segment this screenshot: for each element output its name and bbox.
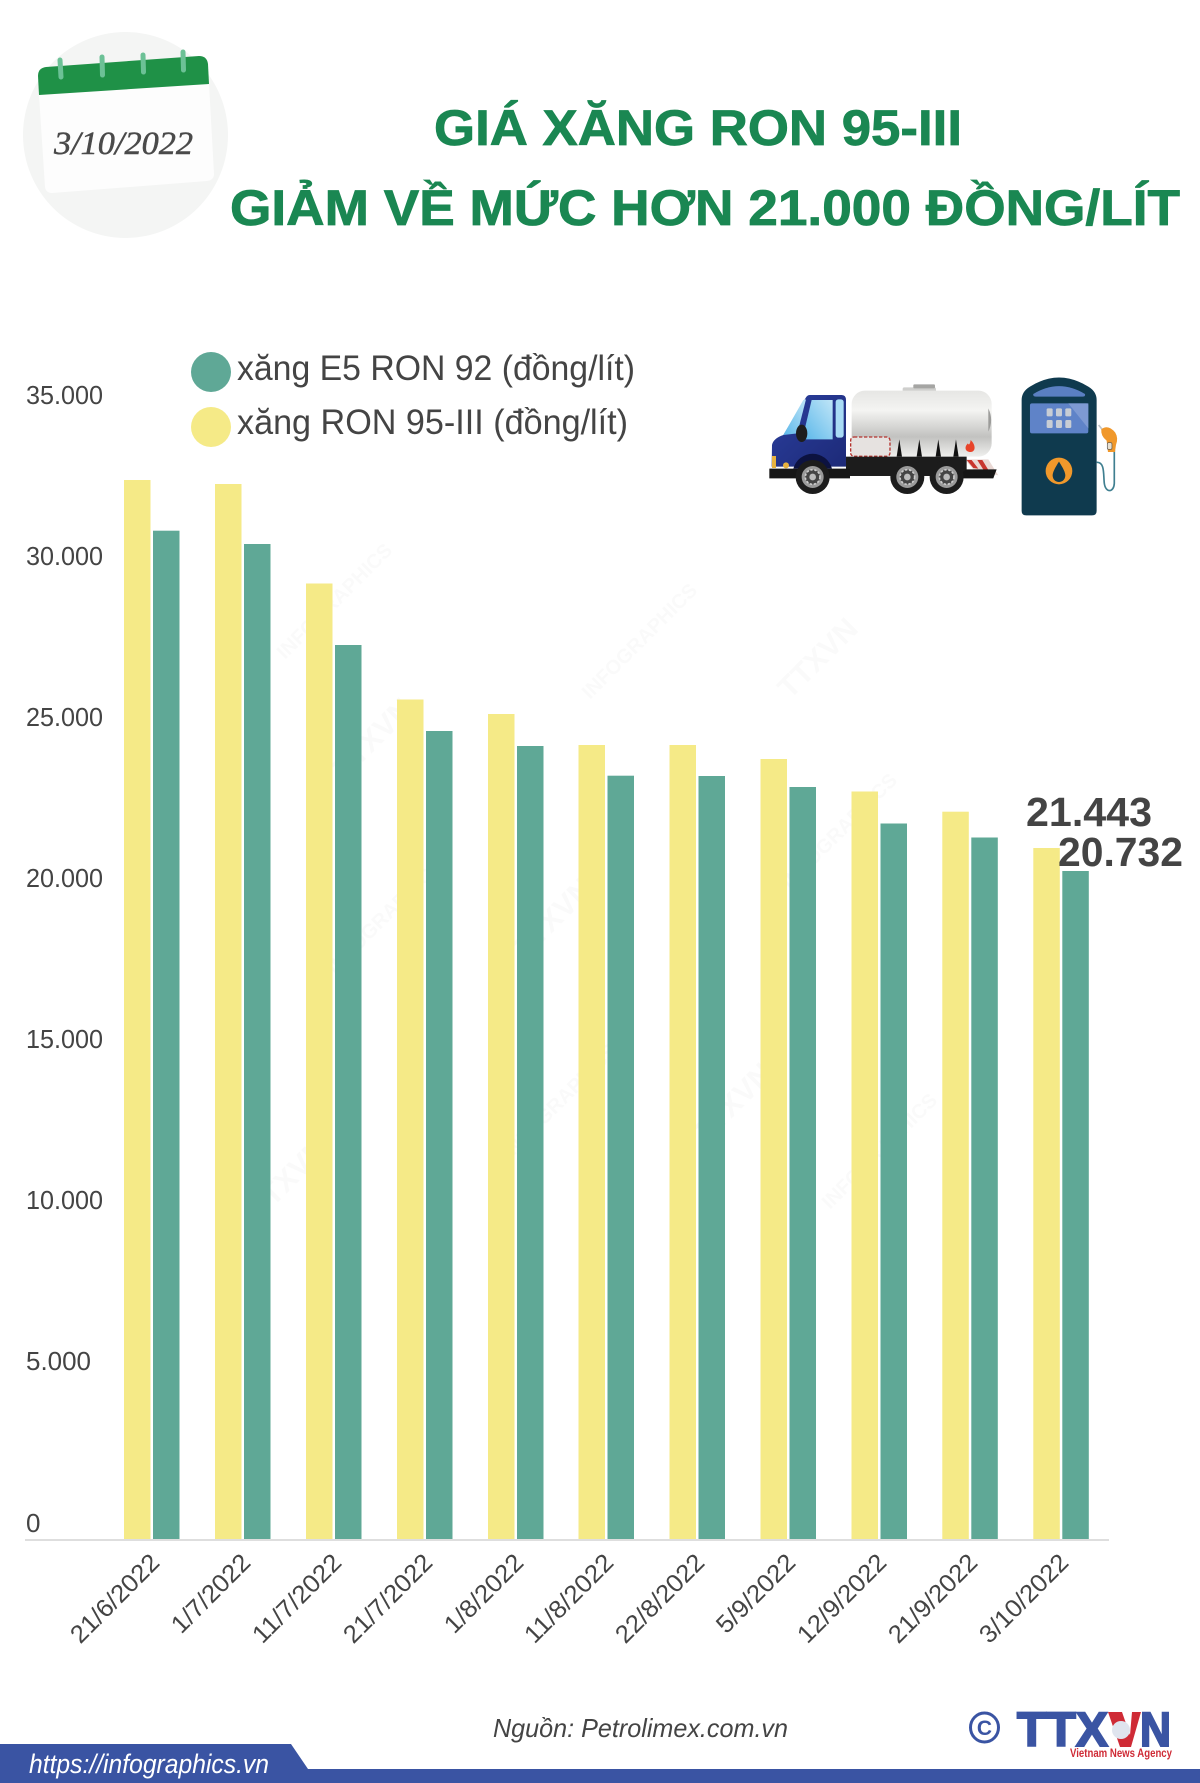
logo: TTXVN [970,1704,1173,1760]
y axis labels: 10.000 [26,1185,103,1215]
icon: fuel pump [1022,377,1117,515]
legend: xăng RON 95-III (đồng/lít) [237,403,628,442]
watermarks: INFOGRAPHICS [578,580,702,704]
watermarks: TTXVN [507,872,599,965]
y axis labels: 30.000 [26,541,103,571]
x axis date labels [65,1548,1074,1649]
y axis labels: 25.000 [26,702,103,732]
source: Nguồn: Petrolimex.com.vn [493,1713,788,1743]
watermarks: INFOGRAPHICS [818,1090,942,1214]
legend: xăng E5 RON 92 (đồng/lít) [237,349,635,388]
footer band with url: https://infographics.vn [29,1749,269,1779]
watermarks: INFOGRAPHICS [323,855,447,979]
logo: TTXVN: N [1140,1704,1171,1757]
legend [191,349,635,447]
watermarks: INFOGRAPHICS [273,540,397,664]
title: GIÁ XĂNG RON 95-III [434,100,962,156]
final value labels [1026,789,1183,875]
watermarks: TTXVN [687,1057,779,1150]
y axis labels: 0 [26,1508,40,1538]
x axis date labels: 12/9/2022 [792,1548,892,1649]
y axis labels [26,380,103,1538]
x axis date labels: 21/6/2022 [65,1548,165,1649]
yellow bars: RON 95-III [124,480,1060,1540]
final value labels: 20.732 [1058,829,1183,875]
title: GIẢM VỀ MỨC HƠN 21.000 ĐỒNG/LÍT [230,180,1180,236]
chart: price bars [25,380,1183,1649]
final value labels: 21.443 [1026,789,1152,835]
watermarks: INFOGRAPHICS [778,770,902,894]
logo: TTXVN: TTX [1017,1704,1108,1757]
x axis date labels: 3/10/2022 [974,1548,1074,1649]
x axis date labels: 1/7/2022 [166,1548,256,1639]
icon: calendar with date [23,32,228,238]
y axis labels: 5.000 [26,1346,91,1376]
x axis date labels: 22/8/2022 [610,1548,710,1649]
x axis date labels: 11/8/2022 [519,1548,619,1649]
y axis labels: 35.000 [26,380,103,410]
watermarks: TTXVN [772,612,864,705]
y axis labels: 20.000 [26,863,103,893]
watermarks: INFOGRAPHICS [498,1040,622,1164]
x axis date labels: 21/7/2022 [338,1548,438,1649]
green bars: E5 RON 92 [153,531,1089,1540]
watermarks: TTXVN [327,692,419,785]
logo: TTXVN: Vietnam News Agency [1070,1748,1173,1760]
logo: TTXVN: C [977,1717,992,1740]
title [230,100,1180,236]
x axis date labels: 21/9/2022 [883,1548,983,1649]
x axis date labels: 11/7/2022 [247,1548,347,1649]
x axis date labels: 1/8/2022 [439,1548,529,1639]
y axis labels: 15.000 [26,1024,103,1054]
watermarks: TTXVN [242,1132,334,1225]
watermarks [242,540,942,1225]
x axis date labels: 5/9/2022 [711,1548,801,1639]
date: 3/10/2022 [53,126,193,162]
footer band with url [0,1744,1200,1783]
icon: fuel tanker truck [769,384,998,494]
